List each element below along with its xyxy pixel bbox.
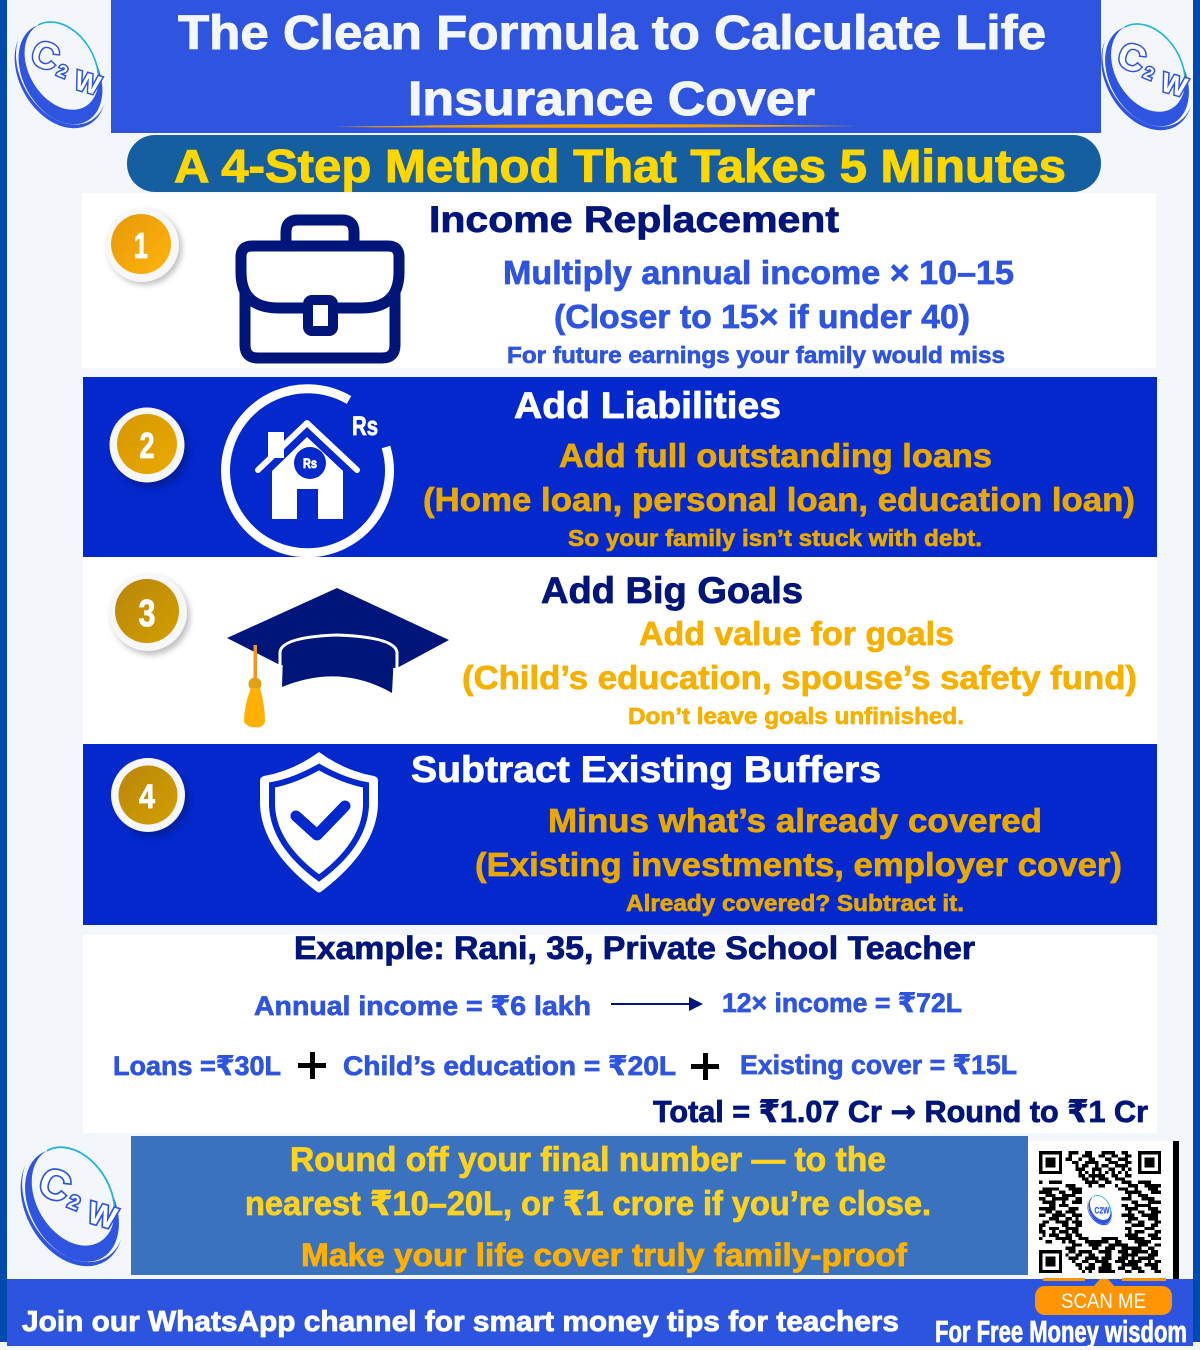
logo: top right: C [1112, 33, 1152, 81]
logo: bottom left: 2 [65, 1192, 83, 1215]
step 4 heading: Subtract Existing Buffers [411, 749, 881, 790]
step 4 instruction: Minus what’s already covered [548, 802, 1042, 839]
icon: house with rupee [226, 389, 390, 553]
panel: step 2 add liabilities [83, 377, 1157, 557]
logo: top right: W [1158, 67, 1191, 103]
icon: graduation cap [227, 588, 449, 727]
logo: top left: 2 [54, 61, 70, 82]
panel: step 1 income replacement [82, 193, 1156, 368]
logo: top left [14, 21, 105, 128]
subtitle text: A 4-Step Method That Takes 5 Minutes [174, 140, 1066, 192]
step 3 note: Don’t leave goals unfinished. [628, 703, 964, 729]
logo: top right: 2 [1141, 63, 1157, 84]
panel: worked example [83, 930, 1157, 1133]
subtitle pill [127, 135, 1101, 192]
step 1 heading: Income Replacement [429, 199, 839, 240]
logo: top left: W [71, 65, 104, 101]
qr centre logo: C2W [1094, 1205, 1110, 1215]
step 2 loan types: (Home loan, personal loan, education loan) [423, 481, 1135, 518]
logo: top right [1101, 23, 1192, 130]
title banner [111, 0, 1101, 133]
arrow [611, 997, 703, 1011]
badge 3: 3 [138, 593, 156, 635]
plus sign [691, 1053, 719, 1080]
icon: house with rupee: Rs [303, 455, 317, 471]
whatsapp call to action: Join our WhatsApp channel for smart money tips for teachers [22, 1306, 899, 1338]
badge 1 [105, 208, 182, 285]
example heading: Example: Rani, 35, Private School Teacher [294, 930, 975, 966]
logo: bottom left [20, 1146, 122, 1266]
badge 4 [111, 758, 189, 837]
step 2 instruction: Add full outstanding loans [559, 437, 992, 474]
badge 2: 2 [140, 425, 154, 466]
child education: Child’s education = ₹20L [343, 1051, 676, 1081]
step 4 note: Already covered? Subtract it. [626, 890, 964, 916]
title line 1: The Clean Formula to Calculate Life [178, 7, 1046, 60]
panel: rounding tip [131, 1136, 1028, 1275]
icon: shield with check [260, 752, 378, 892]
tip line 2: nearest ₹10–20L, or ₹1 crore if you’re close. [245, 1185, 931, 1223]
icon: house with rupee: Rs [352, 411, 378, 441]
total: Total = ₹1.07 Cr → Round to ₹1 Cr [653, 1094, 1148, 1130]
step 3 heading: Add Big Goals [541, 570, 803, 611]
step 2 heading: Add Liabilities [514, 385, 781, 426]
logo: top left: C [25, 31, 65, 79]
loans: Loans =₹30L [113, 1051, 281, 1081]
step 3 goal types: (Child’s education, spouse’s safety fund) [462, 659, 1137, 696]
panel: footer [7, 1279, 1193, 1349]
step 4 cover types: (Existing investments, employer cover) [475, 846, 1122, 883]
badge 3 [109, 573, 190, 655]
title line 2: Insurance Cover [408, 73, 815, 126]
income multiple: 12× income = ₹72L [722, 988, 962, 1018]
icon: briefcase [241, 220, 399, 358]
scan me label: SCAN ME [1061, 1290, 1146, 1313]
step 1 note: For future earnings your family would miss [507, 342, 1005, 368]
annual income: Annual income = ₹6 lakh [254, 991, 591, 1021]
step 1 qualifier: (Closer to 15× if under 40) [554, 298, 970, 335]
step 1 formula: Multiply annual income × 10–15 [503, 254, 1014, 291]
tip line 1: Round off your final number — to the [290, 1141, 886, 1179]
qr centre logo [1087, 1195, 1113, 1226]
logo: bottom left: C [32, 1157, 78, 1212]
step 3 instruction: Add value for goals [639, 615, 954, 652]
scan me button [1035, 1278, 1172, 1315]
badge 4: 4 [139, 778, 155, 816]
title underline [335, 124, 855, 128]
tip line 3: Make your life cover truly family-proof [301, 1237, 907, 1273]
qr code [1028, 1141, 1179, 1280]
step 2 note: So your family isn’t stuck with debt. [568, 525, 982, 551]
badge 1: 1 [134, 225, 148, 266]
logo: bottom left: W [84, 1196, 121, 1236]
plus sign [298, 1052, 326, 1079]
badge 2 [110, 408, 189, 488]
panel: step 4 subtract existing buffers [83, 744, 1157, 925]
existing cover: Existing cover = ₹15L [740, 1050, 1017, 1080]
panel: step 3 add big goals [83, 557, 1157, 744]
